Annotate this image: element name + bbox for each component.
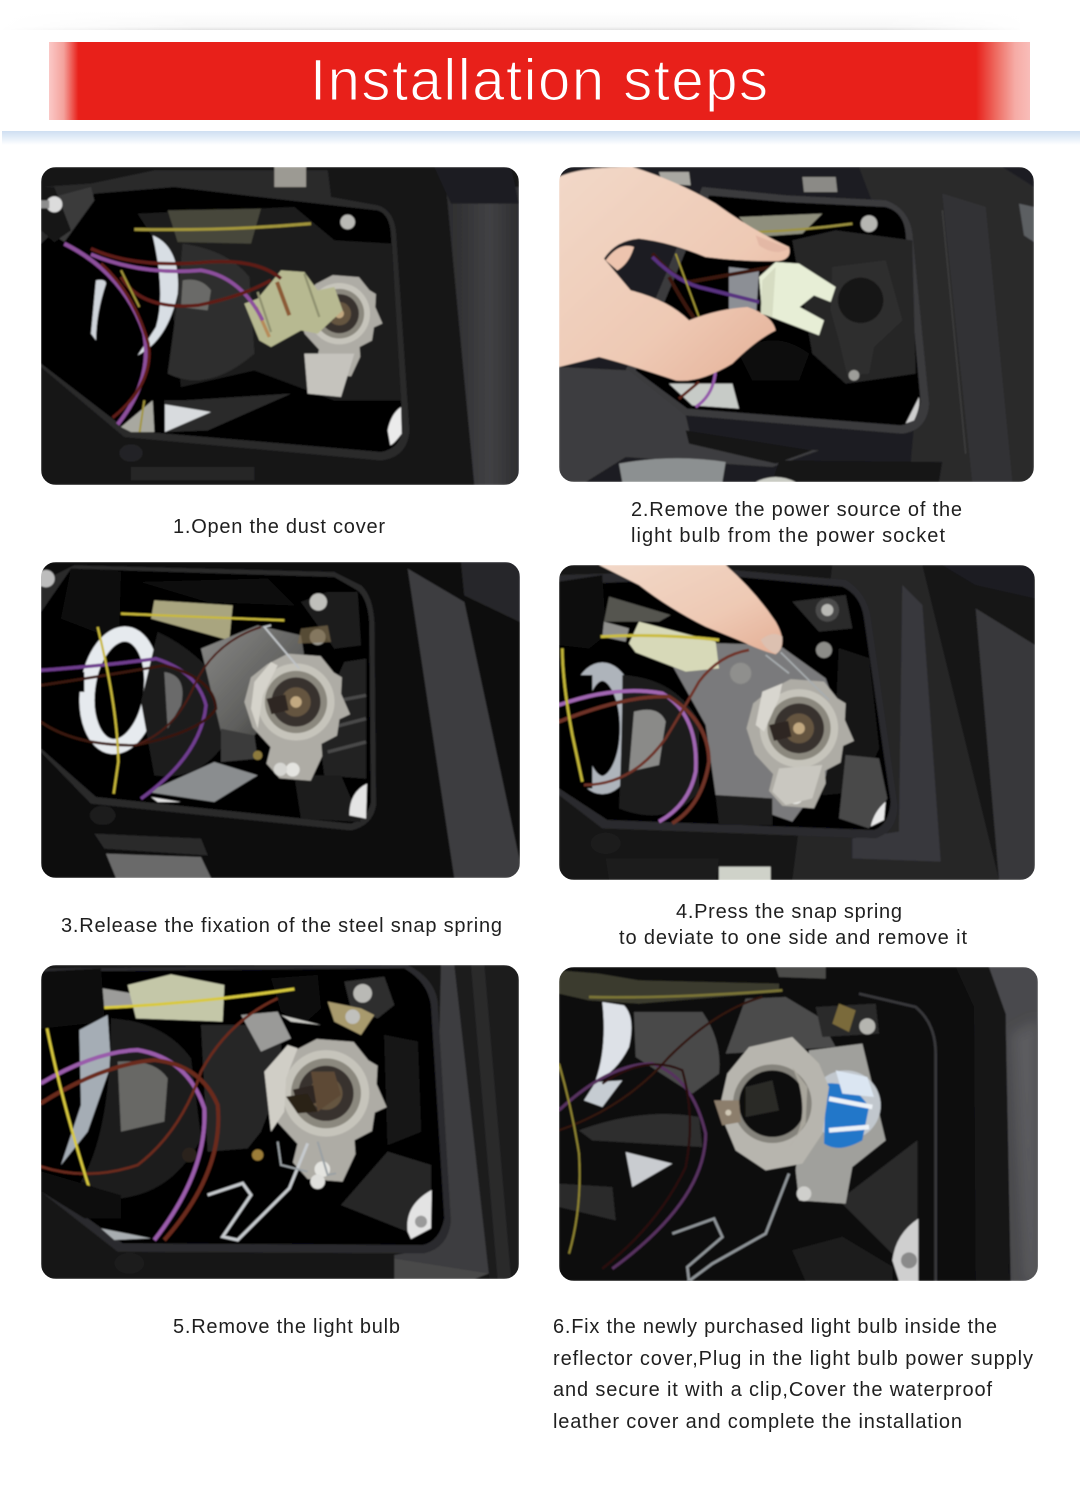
photo 1: open dust cover: [41, 167, 519, 485]
caption 4 line 2: to deviate to one side and remove it: [619, 927, 967, 949]
photo 3: release steel snap spring: [37, 562, 520, 878]
caption 6: [553, 1316, 1033, 1433]
caption 6: leather cover and complete the installation: [553, 1411, 962, 1433]
caption 6: reflector cover,Plug in the light bulb power supply: [553, 1348, 1033, 1370]
blue divider band: [2, 131, 1080, 145]
top shadow band: [0, 12, 1080, 30]
caption 3: 3.Release the fixation of the steel snap spring: [61, 915, 502, 937]
photo 4: press snap spring: [559, 565, 1035, 880]
photo 5: remove light bulb: [41, 965, 519, 1279]
caption 1: 1.Open the dust cover: [173, 516, 385, 538]
photo 6: fix new light bulb: [559, 967, 1038, 1281]
title: Installation steps: [310, 48, 768, 113]
caption 2 line 2: light bulb from the power socket: [631, 525, 945, 547]
caption 2: 2.Remove the power source of the: [631, 499, 962, 521]
caption 4: 4.Press the snap spring: [676, 901, 902, 923]
caption 6: 6.Fix the newly purchased light bulb inside the: [553, 1316, 997, 1338]
caption 6: and secure it with a clip,Cover the waterproof: [553, 1379, 992, 1401]
caption 5: 5.Remove the light bulb: [173, 1316, 400, 1338]
title banner: [49, 42, 1030, 120]
photo 2: remove power source: [559, 167, 1034, 482]
